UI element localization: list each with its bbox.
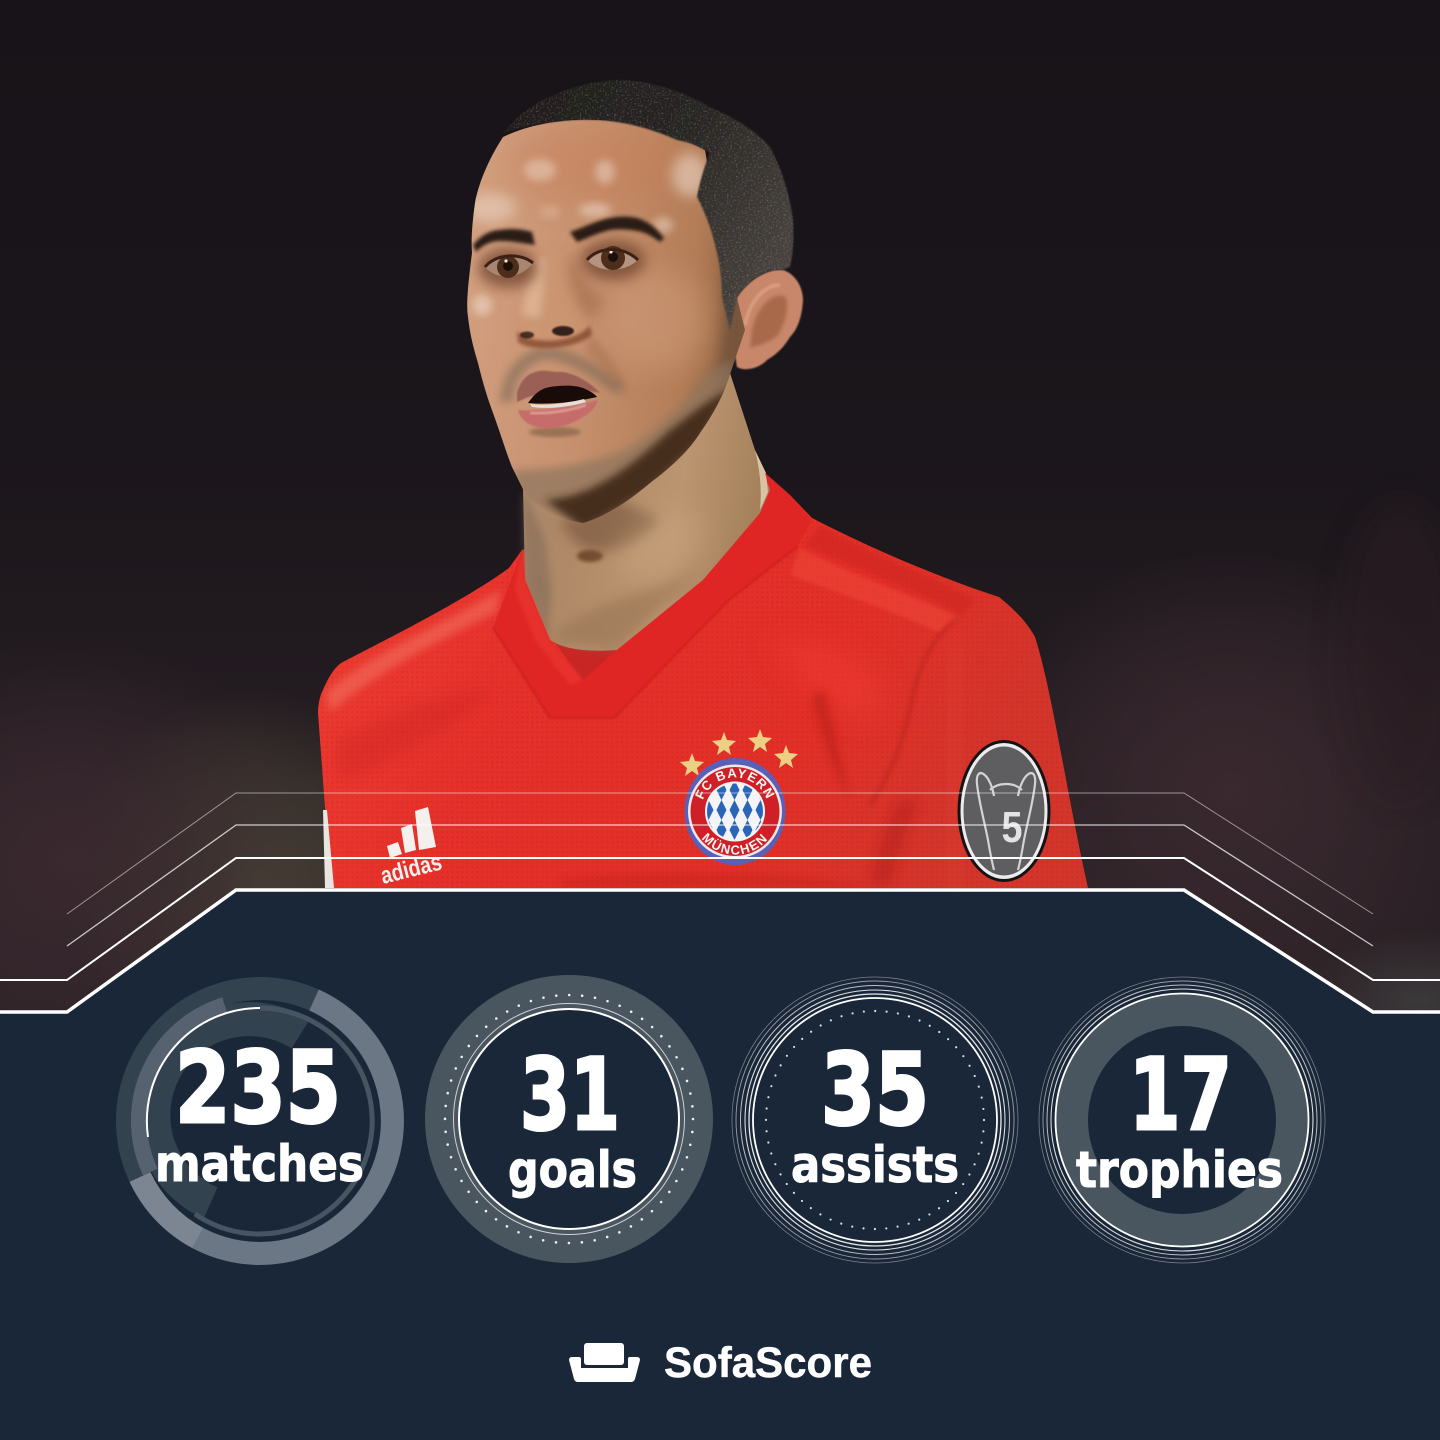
- label: matches: [155, 1135, 364, 1193]
- SofaScore logo: [569, 1339, 872, 1387]
- label: goals: [508, 1141, 637, 1199]
- nasolabial shading: [586, 340, 620, 380]
- sleeve trim: [323, 810, 334, 888]
- bright outer arc: [198, 1000, 392, 1253]
- hair: [503, 80, 793, 330]
- collar: [493, 473, 812, 718]
- undershirt: [550, 636, 620, 682]
- value: 235: [175, 1031, 341, 1146]
- adidas logo: [378, 807, 445, 890]
- blurred stadium background: [0, 0, 1440, 1080]
- sleeve seam and folds: [870, 617, 958, 805]
- inner dim annulus: [153, 1019, 301, 1203]
- icon: sofa: [569, 1343, 640, 1382]
- Champions League badge: [958, 740, 1050, 882]
- jersey: [318, 473, 1088, 888]
- ear: [734, 270, 803, 369]
- FC Bayern crest: [684, 758, 786, 865]
- lower-left highlighted arc: [140, 1177, 198, 1238]
- moustache stubble: [507, 353, 620, 402]
- stats panel: [0, 890, 1440, 1440]
- stat circle: goals: [442, 992, 696, 1246]
- decorative outline lines: [0, 793, 1440, 1012]
- forehead colour and glare: [464, 125, 708, 316]
- face: [464, 120, 752, 530]
- FC Bayern crest: FC BAYERN: [695, 768, 774, 800]
- beard: [512, 360, 732, 530]
- label: assists: [791, 1136, 959, 1194]
- value: 31: [520, 1038, 620, 1153]
- thin white arc: [147, 1008, 260, 1137]
- neck: [523, 373, 770, 651]
- nose: [515, 247, 606, 348]
- stat circle: trophies: [1039, 977, 1325, 1263]
- FC Bayern crest: MÜNCHEN: [702, 832, 768, 855]
- stat circle: matches: [128, 988, 392, 1254]
- label: trophies: [1076, 1141, 1283, 1199]
- crest stars: [680, 729, 798, 776]
- Champions League badge: 5: [1002, 803, 1022, 852]
- thin grey ring: [195, 1008, 372, 1234]
- player portrait: [318, 80, 1088, 890]
- value: 35: [821, 1033, 929, 1148]
- eyes and brows: [473, 216, 664, 288]
- left jaw shadow: [464, 340, 505, 470]
- cheek shading: [624, 276, 708, 366]
- left ring arc: [139, 1005, 225, 1172]
- value: 17: [1129, 1038, 1232, 1153]
- stat circle: assists: [732, 977, 1018, 1263]
- adidas logo: adidas: [378, 849, 445, 890]
- mouth: [517, 371, 600, 428]
- sideburn stubble: [712, 260, 745, 386]
- wordmark: SofaScore: [664, 1339, 872, 1387]
